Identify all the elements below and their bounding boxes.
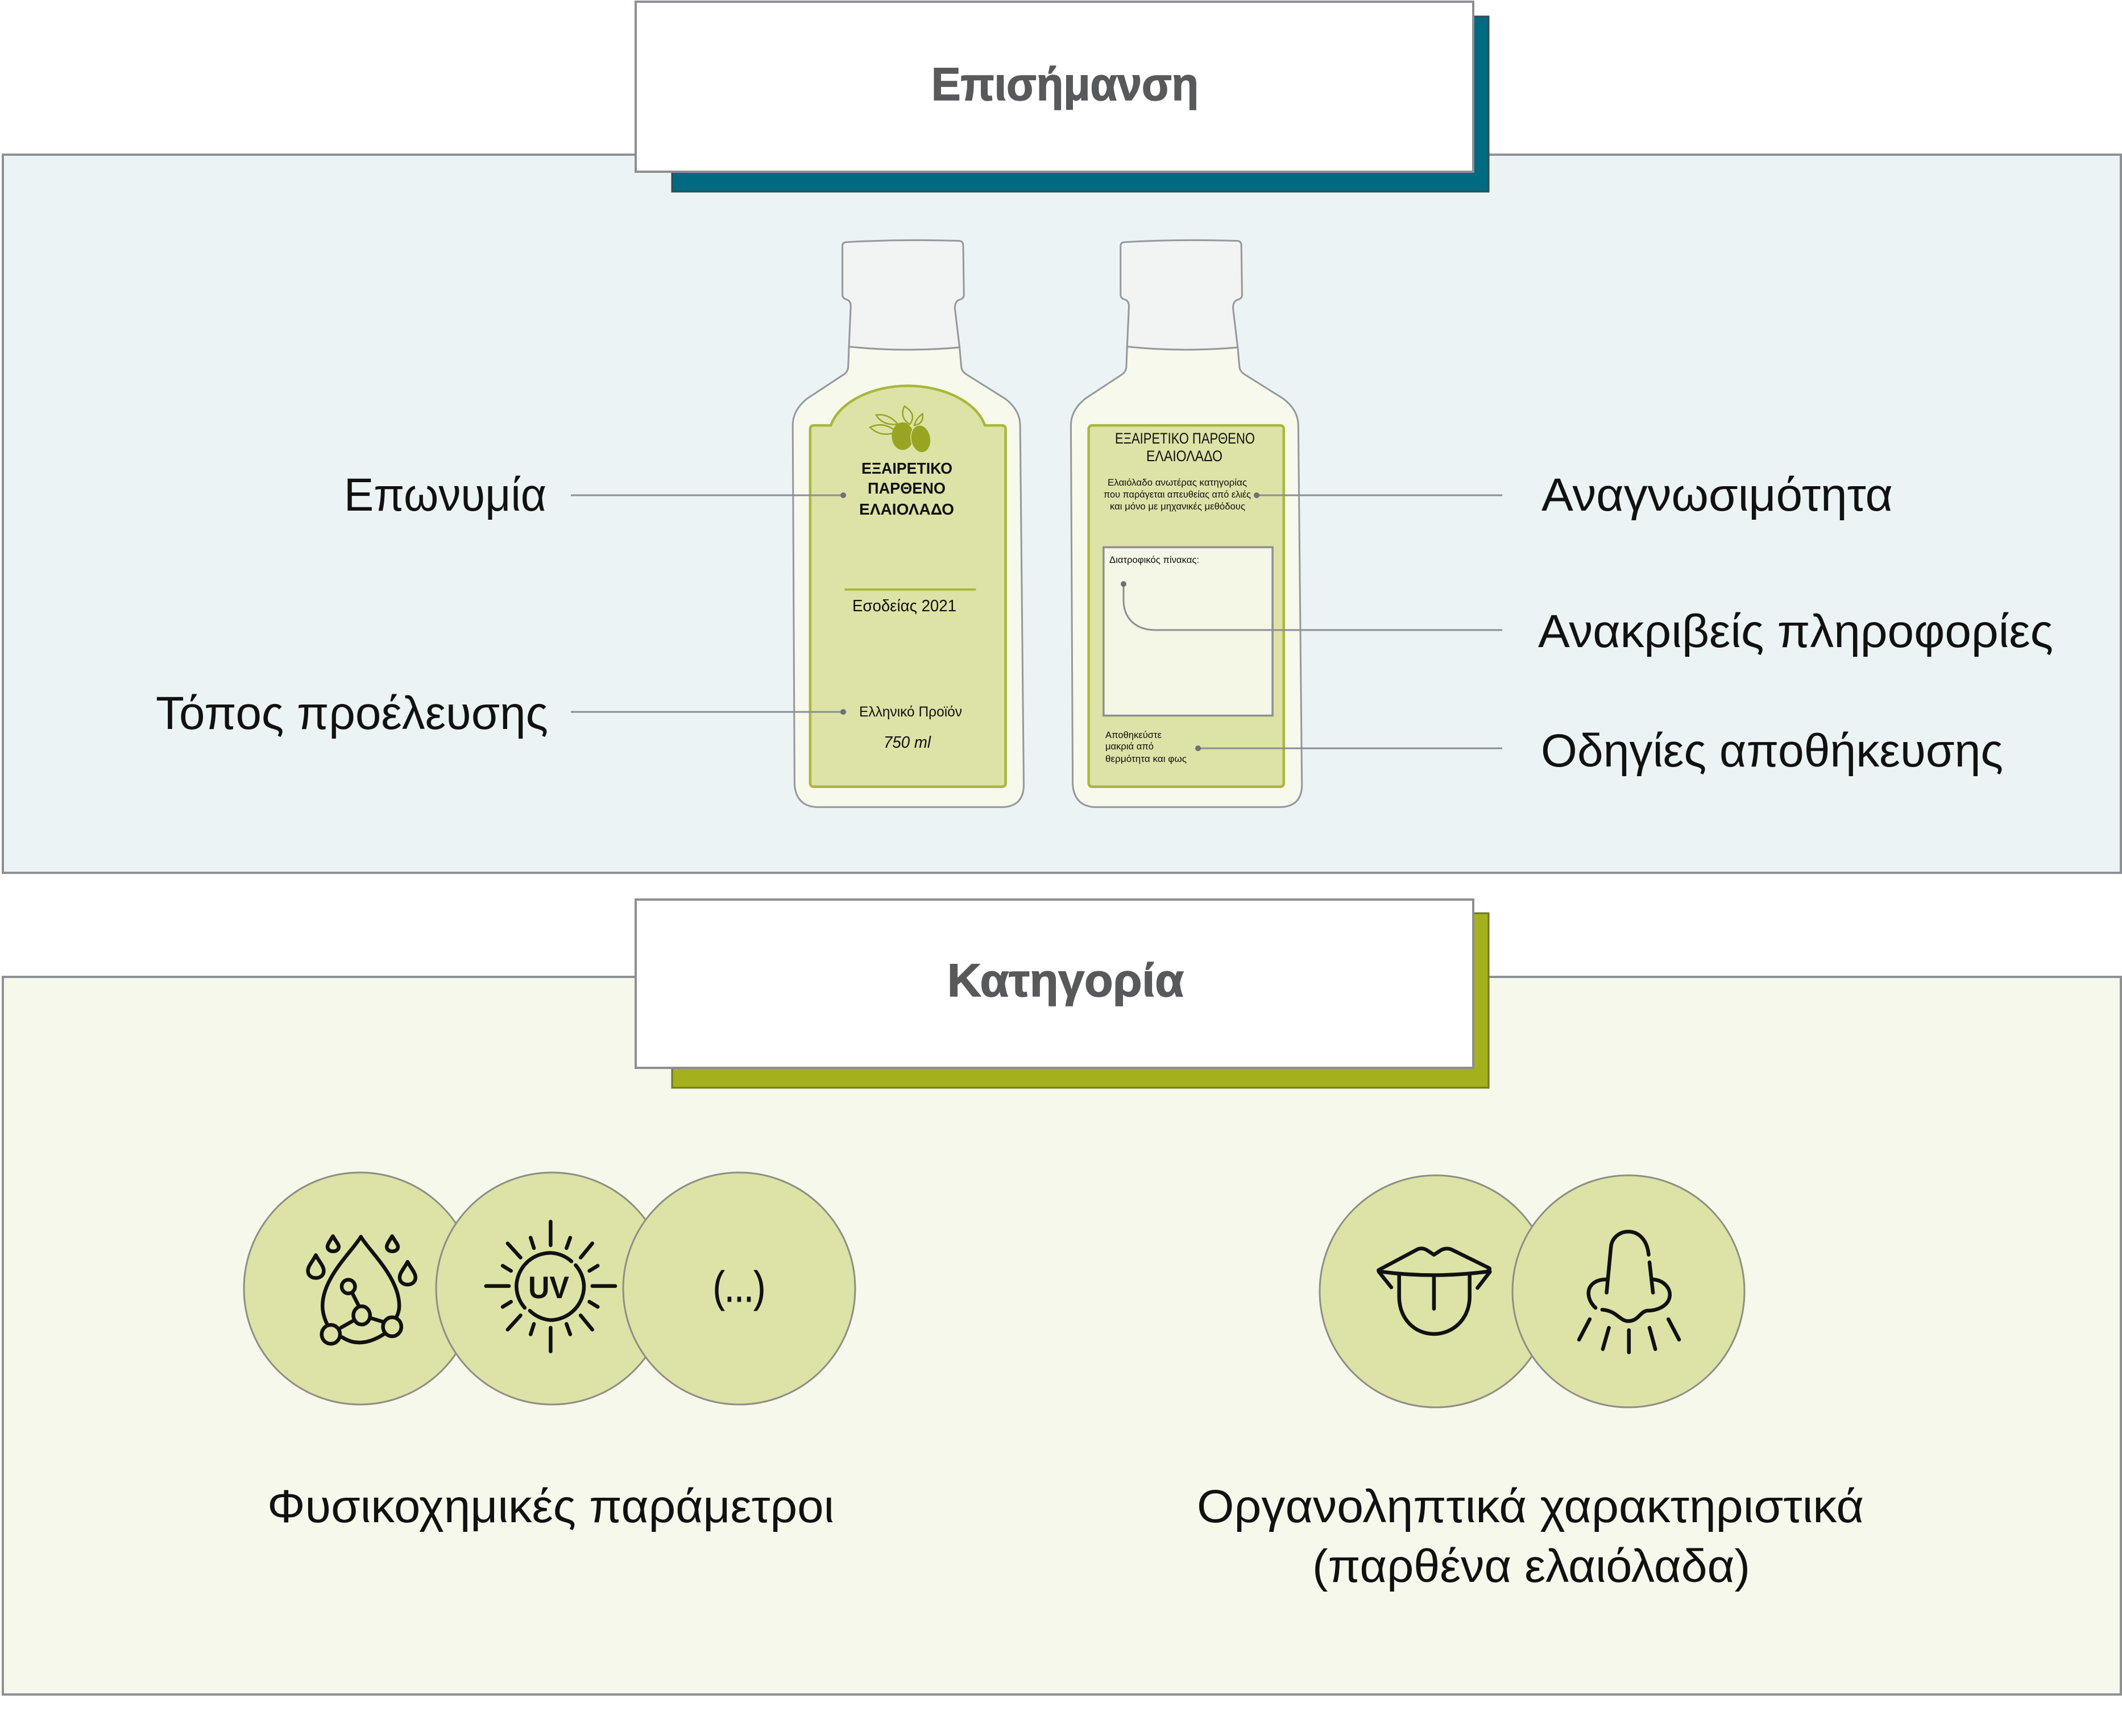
back label title xyxy=(1115,430,1255,465)
back label description: Ελαιόλαδο ανωτέρας κατηγορίας xyxy=(1108,477,1247,488)
bottle shape: back xyxy=(1071,240,1302,807)
icon: UV sun xyxy=(486,1221,615,1352)
back label description: που παράγεται απευθείας από ελιές xyxy=(1104,489,1251,500)
storage text: θερμότητα και φως xyxy=(1105,753,1187,764)
circle: taste xyxy=(1320,1175,1552,1407)
circle: smell xyxy=(1512,1175,1744,1407)
heading shadow: labelling xyxy=(672,16,1489,192)
caption: organoleptic characteristics: Οργανοληπτικά χαρακτηριστικά xyxy=(1197,1481,1864,1532)
back label title: ΕΞΑΙΡΕΤΙΚΟ ΠΑΡΘΕΝΟ xyxy=(1115,430,1255,447)
label: inaccurate information: Ανακριβείς πληροφορίες xyxy=(1538,606,2053,657)
caption: physicochemical parameters: Φυσικοχημικές παράμετροι xyxy=(267,1481,834,1532)
icon: olive branch xyxy=(870,406,933,454)
leader line: origin xyxy=(571,709,846,715)
circle icons: organoleptic xyxy=(1320,1175,1744,1407)
volume text: 750 ml xyxy=(884,734,931,752)
circle: ellipsis xyxy=(623,1172,855,1404)
front bottle xyxy=(793,240,1023,807)
icon: nose xyxy=(1579,1232,1679,1352)
icon: droplet with molecule xyxy=(308,1236,416,1344)
caption: organoleptic characteristics xyxy=(1197,1481,1864,1592)
heading text: category: Κατηγορία xyxy=(947,955,1184,1006)
leader line: storage xyxy=(1195,745,1502,751)
storage text xyxy=(1105,730,1187,764)
heading card: category xyxy=(636,900,1473,1068)
bottle shape: front xyxy=(793,240,1023,807)
label: legibility: Αναγνωσιμότητα xyxy=(1541,469,1893,521)
back label title: ΕΛΑΙΟΛΑΔΟ xyxy=(1146,448,1222,465)
leader line: legibility xyxy=(1254,492,1502,498)
product name text: ΕΛΑΙΟΛΑΔΟ xyxy=(859,500,954,518)
label: brand: Επωνυμία xyxy=(344,469,546,521)
label: place of origin: Τόπος προέλευσης xyxy=(156,687,548,739)
leader line: inaccurate information xyxy=(1121,581,1502,630)
storage text: μακριά από xyxy=(1105,741,1154,752)
back label description: και μόνο με μηχανικές μεθόδους xyxy=(1110,501,1245,512)
panel: labelling xyxy=(3,155,2121,873)
back bottle xyxy=(1071,240,1302,807)
icon: ellipsis: (...) xyxy=(713,1263,765,1311)
product name text: ΠΑΡΘΕΝΟ xyxy=(868,479,946,497)
label: storage instructions: Οδηγίες αποθήκευσης xyxy=(1541,725,2003,777)
heading card: labelling xyxy=(636,2,1473,172)
product name text xyxy=(859,459,954,518)
circle: UV xyxy=(436,1172,668,1404)
caption: organoleptic characteristics: (παρθένα ελαιόλαδα) xyxy=(1312,1540,1750,1592)
circle icons: physicochemical xyxy=(244,1172,855,1404)
back label description xyxy=(1104,477,1251,512)
leader line: brand xyxy=(571,492,846,498)
icon: UV sun: UV xyxy=(528,1270,569,1305)
origin text: Ελληνικό Προϊόν xyxy=(859,704,962,720)
storage text: Αποθηκεύστε xyxy=(1105,730,1162,740)
heading text: labelling: Επισήμανση xyxy=(931,59,1199,110)
product name text: ΕΞΑΙΡΕΤΙΚΟ xyxy=(861,459,952,477)
nutrition table title: Διατροφικός πίνακας: xyxy=(1109,554,1199,565)
panel: category xyxy=(3,977,2121,1694)
harvest text: Εσοδείας 2021 xyxy=(852,597,956,615)
icon: mouth and tongue xyxy=(1378,1249,1490,1334)
circle: droplet xyxy=(244,1172,476,1404)
heading shadow: category xyxy=(672,913,1489,1088)
